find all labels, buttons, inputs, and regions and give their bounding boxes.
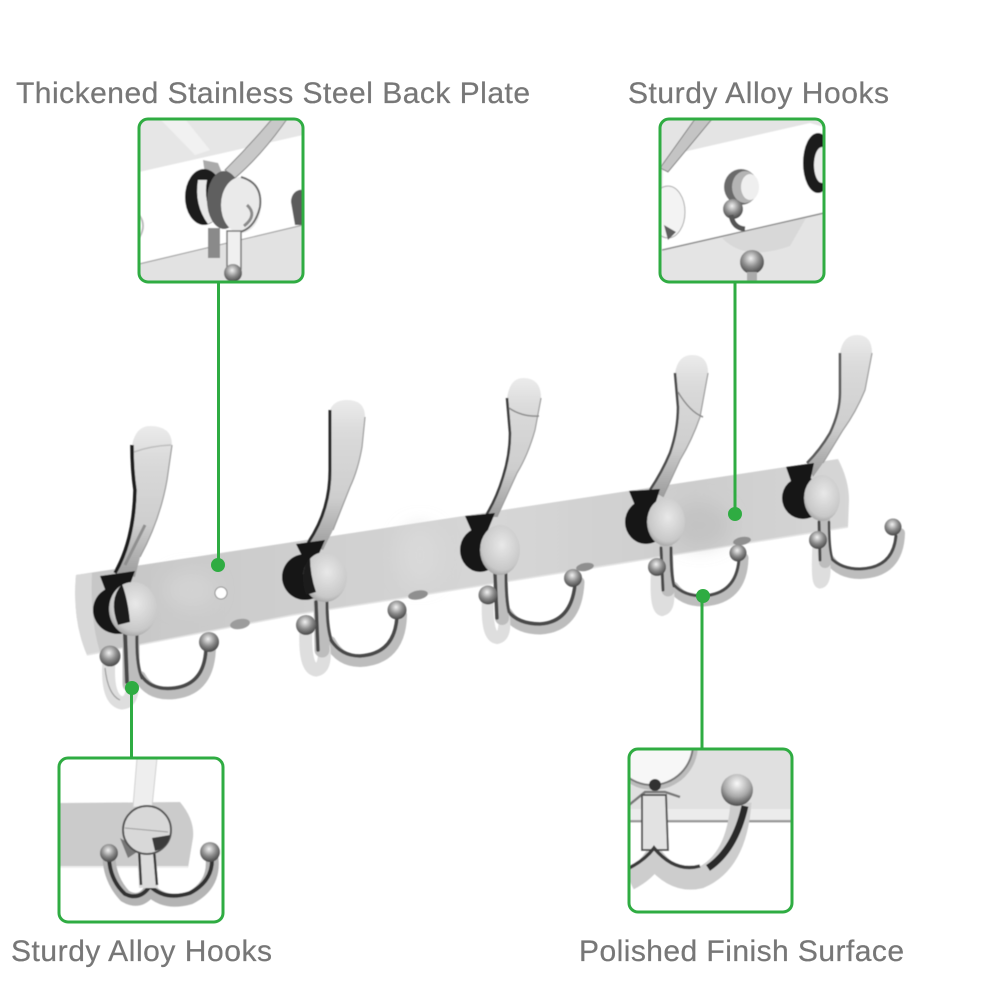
inset: back plate detail <box>139 119 303 282</box>
product: five-hook coat rack <box>75 335 902 703</box>
heading: polished finish: Polished Finish Surface <box>579 935 904 968</box>
inset: double hook detail <box>59 758 223 922</box>
heading: back plate: Thickened Stainless Steel Back Plate <box>16 77 530 110</box>
callout line and dot: polished finish <box>696 589 710 749</box>
hook 5 <box>782 335 902 583</box>
heading: alloy hooks bottom: Sturdy Alloy Hooks <box>11 935 272 968</box>
hook 3 <box>460 378 582 638</box>
hook 2 <box>282 400 406 670</box>
callout line and dot: bottom-left alloy hooks <box>125 681 139 758</box>
hook 1 <box>93 426 219 703</box>
hook 4 <box>625 355 746 610</box>
inset: alloy hook rivet detail <box>651 119 833 282</box>
inset: polished surface detail <box>628 748 794 914</box>
back plate <box>75 459 849 655</box>
callout line and dot: top-right alloy hooks <box>728 282 742 521</box>
heading: alloy hooks top: Sturdy Alloy Hooks <box>628 77 889 110</box>
callout line and dot: back plate <box>211 282 225 572</box>
